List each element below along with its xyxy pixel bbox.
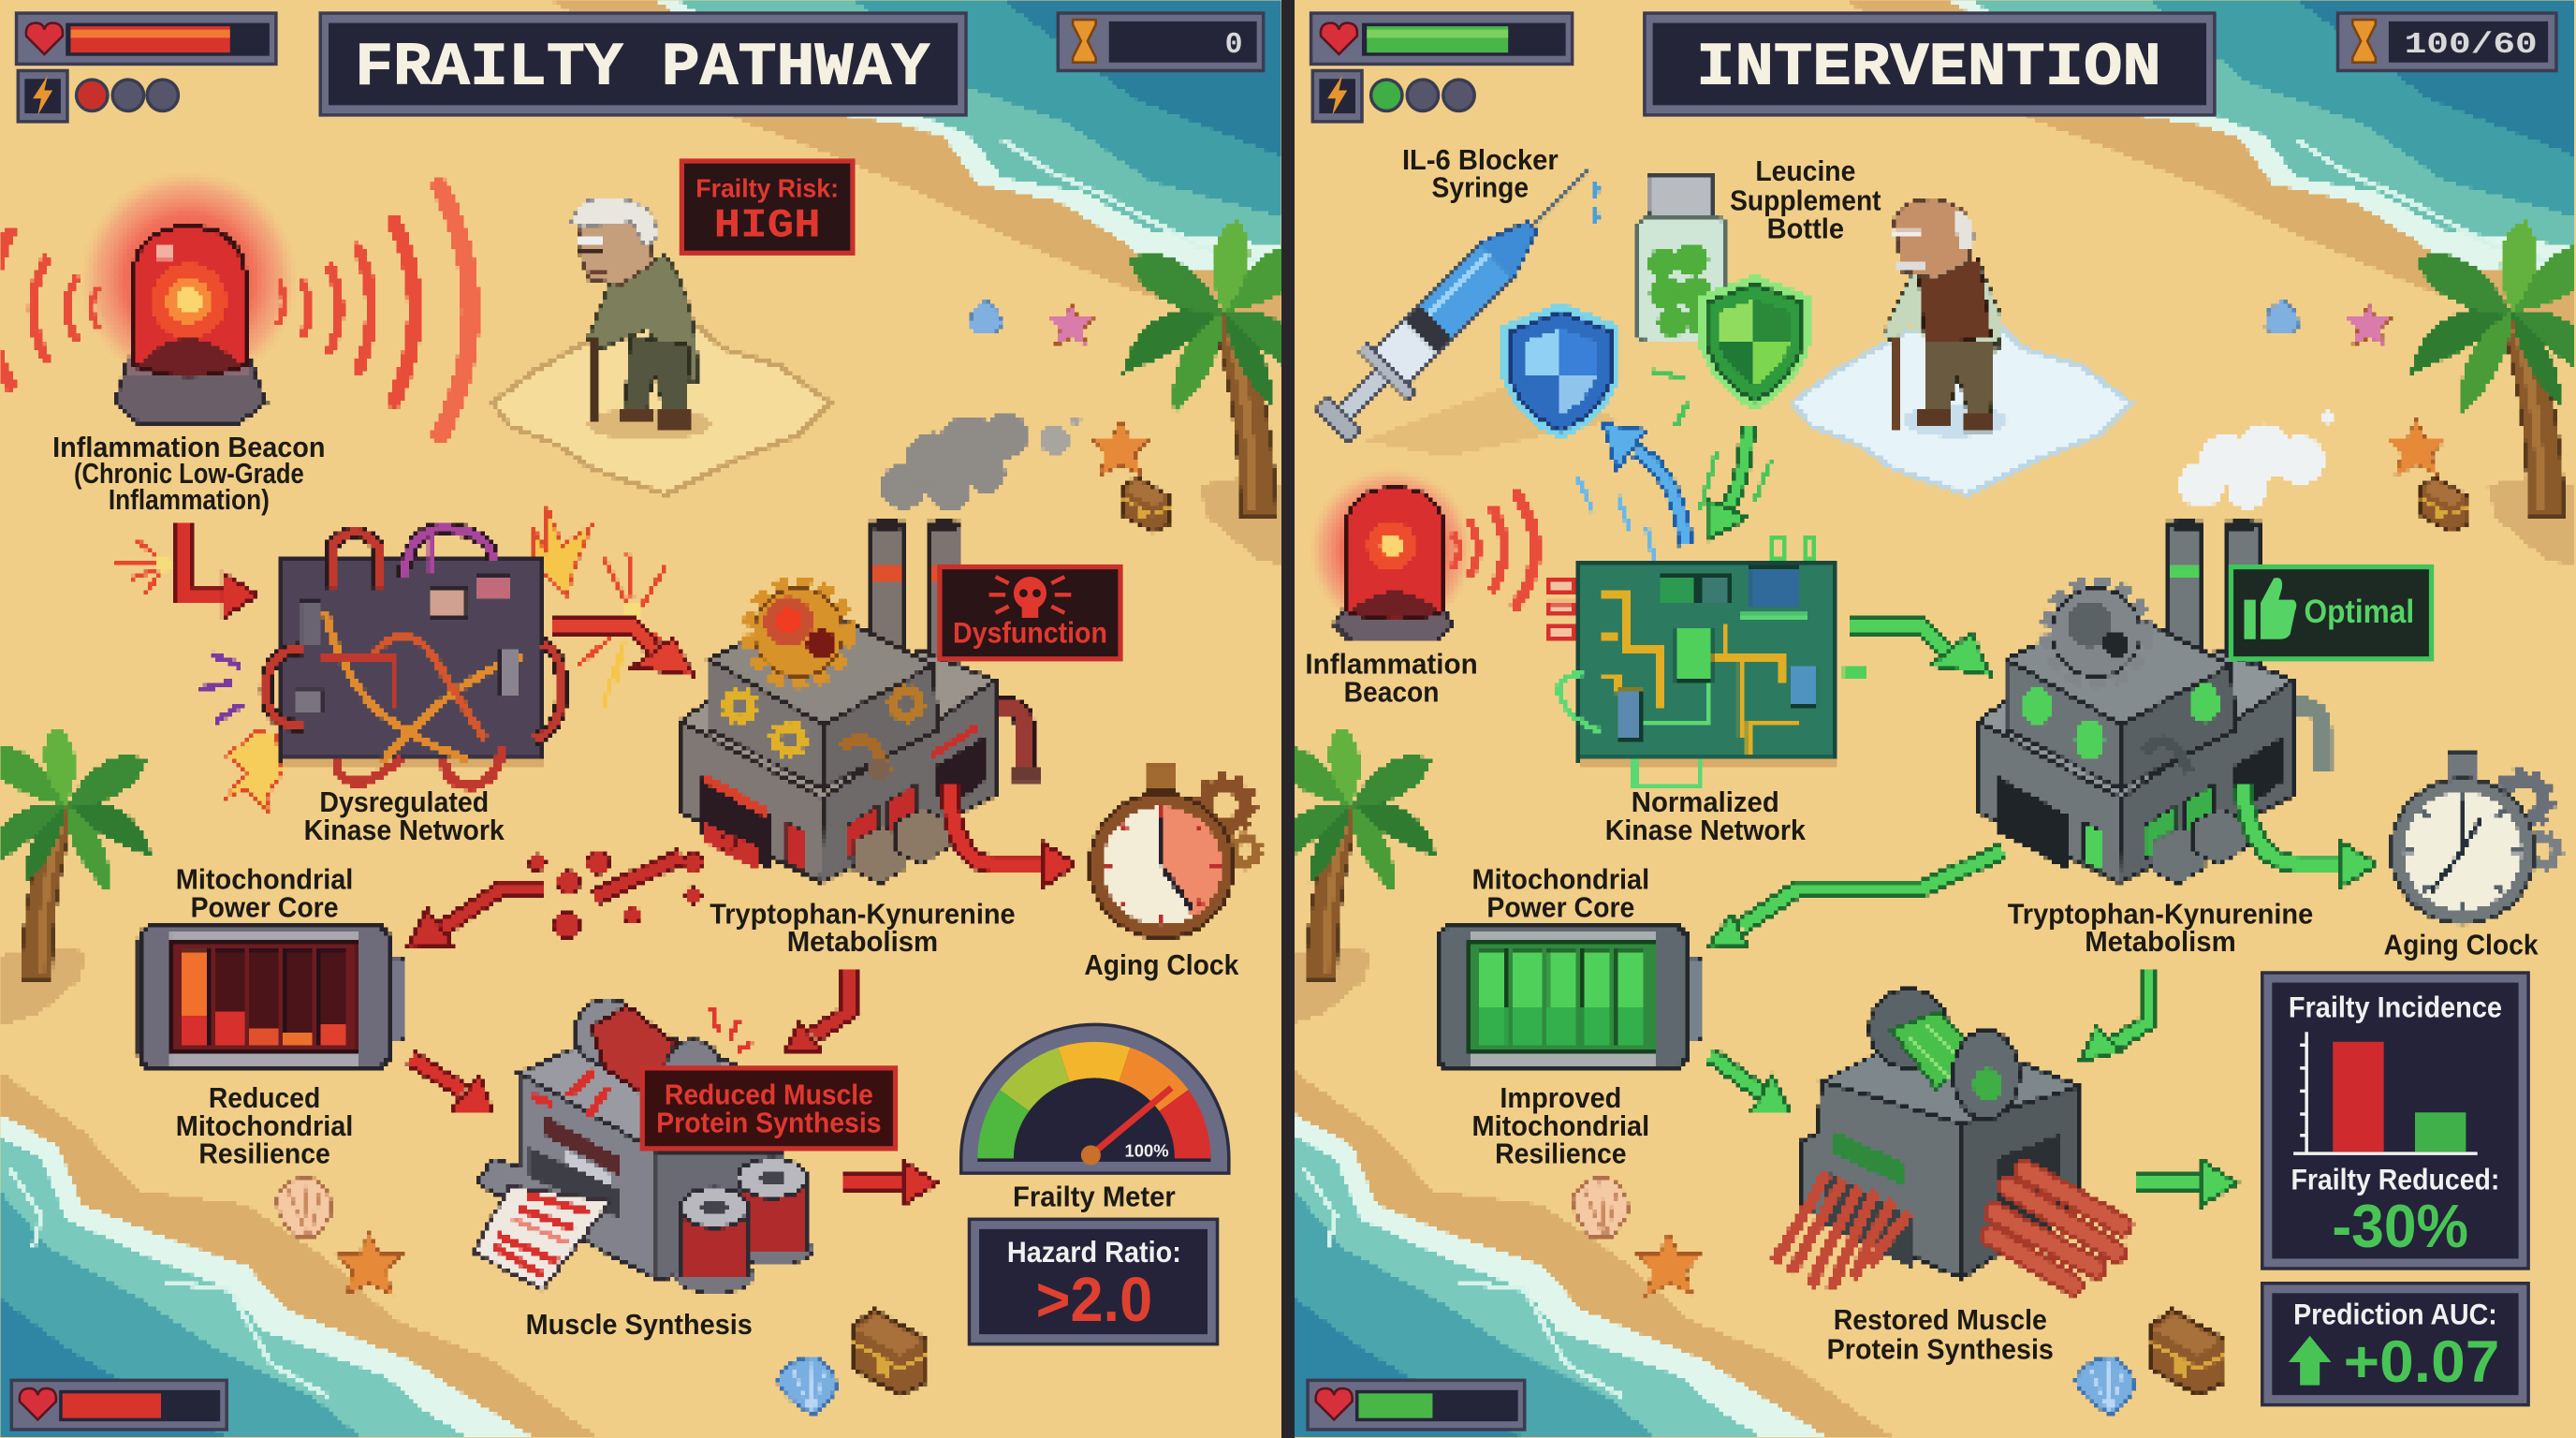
label: IL-6 blocker syringe: IL-6 Blocker: [1402, 143, 1559, 176]
frailty risk badge: Frailty Risk:: [695, 174, 839, 203]
battery power core: [139, 925, 404, 1070]
bottom health bar: [1308, 1380, 1525, 1430]
label: muscle synthesis: Muscle Synthesis: [526, 1308, 753, 1341]
arrow: factory to muscle machine: [783, 970, 849, 1053]
frailty incidence card: Frailty Reduced:: [2291, 1163, 2499, 1196]
prediction AUC card: [2262, 1284, 2528, 1405]
label: inflammation beacon: Inflammation Beacon: [52, 431, 326, 463]
incidence bar chart: [2293, 1032, 2478, 1153]
inflammation beacon: [80, 171, 298, 424]
dysfunction badge: Dysfunction: [953, 615, 1107, 649]
reduced muscle protein synthesis badge: Protein Synthesis: [656, 1106, 882, 1138]
label: tryptophan-kynurenine metabolism: [2008, 897, 2313, 958]
shoreline and water: [1295, 0, 2576, 1438]
dysfunction badge: [940, 567, 1120, 659]
energy slots: [1312, 70, 1474, 122]
title: [320, 13, 966, 115]
upper block: [708, 608, 933, 725]
label: inflammation beacon: Inflammation: [1305, 648, 1478, 681]
normalized kinase board: [1549, 537, 1866, 785]
healthy factory: [1978, 520, 2323, 884]
health bar: [1311, 13, 1573, 64]
arrow: battery to muscle machine: [411, 1058, 493, 1112]
label: leucine supplement bottle: Supplement: [1730, 184, 1881, 217]
leucine bottle: [1636, 174, 1727, 342]
curved green arrow: [1707, 426, 1748, 540]
aging clock: [1090, 764, 1262, 938]
restored muscle machine: [1775, 990, 2123, 1290]
label: dysregulated kinase network: Kinase Network: [304, 814, 505, 846]
shoreline and water: [0, 0, 1281, 1438]
label: inflammation beacon: Inflammation): [109, 483, 270, 516]
syringe: [1308, 143, 1618, 457]
label: reduced mitochondrial resilience: Reduced: [209, 1081, 320, 1114]
palm tree top right: [2410, 220, 2576, 575]
broken arrow: factory to battery: [407, 835, 736, 948]
reduced muscle protein synthesis badge: [642, 1068, 896, 1149]
label: restored muscle protein synthesis: Restored Muscle: [1834, 1303, 2047, 1336]
label: normalized kinase network: Normalized: [1632, 785, 1779, 818]
palm tree top right: [1121, 219, 1281, 565]
label: reduced mitochondrial resilience: [176, 1081, 353, 1170]
label: improved mitochondrial resilience: [1472, 1081, 1649, 1170]
title: [1645, 13, 2215, 115]
label: leucine supplement bottle: Bottle: [1767, 212, 1844, 244]
label: frailty meter: Frailty Meter: [1013, 1180, 1176, 1212]
arrow: factory to aging clock: [949, 785, 1076, 888]
lower tier: [681, 651, 996, 799]
small signal waves: [1454, 493, 1535, 605]
label: improved mitochondrial resilience: Mitochondrial: [1472, 1109, 1649, 1142]
label: normalized kinase network: Kinase Network: [1605, 814, 1807, 846]
label: restored muscle protein synthesis: Protein Synthesis: [1827, 1333, 2054, 1366]
label: aging clock: Aging Clock: [2384, 929, 2539, 961]
palm tree left: [0, 726, 153, 1029]
arrow: kinase to factory: [553, 626, 694, 675]
label: leucine supplement bottle: Leucine: [1755, 154, 1855, 187]
lower tier: [1978, 651, 2293, 799]
arrow: machine to frailty meter: [842, 1162, 938, 1205]
kynurenine factory: [681, 520, 1040, 884]
signal waves: [0, 187, 471, 435]
upper block: [2006, 608, 2231, 725]
frailty incidence card: -30%: [2332, 1192, 2468, 1260]
arrow: factory to battery: [1707, 851, 2002, 948]
label: improved mitochondrial resilience: Resilience: [1495, 1137, 1627, 1170]
healthy aging clock: [2391, 753, 2561, 923]
frailty risk badge: [681, 161, 853, 253]
panel: intervention: [1266, 0, 2576, 1438]
beach decorations: [276, 299, 1170, 1415]
frailty risk badge: HIGH: [714, 203, 821, 250]
title: FRAILTY PATHWAY: [355, 35, 929, 103]
label: mitochondrial power core: Power Core: [1486, 890, 1634, 923]
health bar: [17, 13, 276, 64]
label: reduced mitochondrial resilience: Resilience: [198, 1137, 330, 1170]
reduced muscle protein synthesis badge: Reduced Muscle: [665, 1078, 873, 1110]
label: reduced mitochondrial resilience: Mitochondrial: [176, 1109, 353, 1142]
palm tree left: [1266, 726, 1437, 1029]
label: tryptophan-kynurenine metabolism: [710, 897, 1016, 958]
hazard ratio card: Hazard Ratio:: [1007, 1235, 1181, 1269]
white smoke: [2178, 411, 2334, 509]
label: inflammation beacon: [52, 431, 326, 516]
blue shield: [1501, 302, 1620, 440]
energy slots: [18, 70, 178, 122]
label: mitochondrial power core: Mitochondrial: [1472, 863, 1649, 896]
arrow: machine to results: [2137, 1160, 2237, 1206]
arrow: factory to clock: [2243, 785, 2378, 888]
small inflammation beacon: [1310, 468, 1473, 641]
kinase network board: [266, 528, 562, 785]
label: tryptophan-kynurenine metabolism: Metabolism: [2085, 925, 2236, 958]
label: improved mitochondrial resilience: Improved: [1500, 1081, 1621, 1114]
arrow: kinase to factory: [1850, 626, 1991, 675]
label: mitochondrial power core: [1472, 863, 1649, 923]
elderly frail man on sand: [493, 198, 829, 494]
label: restored muscle protein synthesis: [1827, 1303, 2054, 1366]
label: inflammation beacon: Beacon: [1344, 675, 1439, 708]
label: aging clock: Aging Clock: [1084, 948, 1239, 981]
prediction AUC card: +0.07: [2344, 1329, 2499, 1395]
optimal badge: Optimal: [2305, 594, 2414, 630]
sparks near kinase: [115, 506, 677, 814]
label: mitochondrial power core: Power Core: [191, 890, 339, 923]
optimal badge: [2231, 567, 2432, 659]
panel: frailty pathway: [0, 0, 1323, 1438]
label: mitochondrial power core: [176, 863, 353, 923]
frailty incidence card: Frailty Incidence: [2289, 990, 2502, 1023]
battery power core full: [1438, 925, 1702, 1070]
timer: [2338, 13, 2556, 70]
green shield: [1699, 274, 1810, 411]
bottom health bar: [11, 1380, 227, 1430]
frailty meter gauge: 100%: [1125, 1141, 1169, 1161]
hazard ratio card: >2.0: [1036, 1266, 1152, 1335]
smoke: [881, 413, 1081, 511]
arrow: battery to machine: [1710, 1055, 1791, 1112]
frailty meter gauge: [961, 1024, 1229, 1173]
muscle synthesis machine: [473, 999, 813, 1293]
label: tryptophan-kynurenine metabolism: Tryptophan-Kynurenine: [2008, 897, 2313, 930]
divider: [1281, 0, 1295, 1438]
frailty incidence card: [2262, 973, 2528, 1269]
curved blue arrow: [1603, 424, 1686, 546]
label: leucine supplement bottle: [1730, 154, 1881, 244]
label: mitochondrial power core: Mitochondrial: [176, 863, 353, 896]
recovered man on ice: [1793, 198, 2130, 494]
sparkle trails: [1577, 372, 1771, 567]
timer: 100/60: [2405, 29, 2538, 62]
title: INTERVENTION: [1696, 35, 2161, 103]
label: inflammation beacon: (Chronic Low-Grade: [74, 457, 304, 490]
hazard ratio card: [970, 1219, 1218, 1344]
label: normalized kinase network: [1605, 785, 1807, 846]
timer: [1058, 13, 1264, 70]
label: tryptophan-kynurenine metabolism: Metabolism: [787, 925, 938, 958]
arrow: beacon to kinase: [184, 522, 258, 618]
label: IL-6 blocker syringe: [1402, 143, 1559, 204]
label: inflammation beacon: [1305, 648, 1478, 708]
label: dysregulated kinase network: [304, 785, 505, 846]
label: IL-6 blocker syringe: Syringe: [1432, 171, 1529, 204]
arrow: factory to machine: [2080, 970, 2149, 1062]
timer: 0: [1225, 29, 1243, 62]
label: dysregulated kinase network: Dysregulated: [319, 785, 489, 818]
label: tryptophan-kynurenine metabolism: Tryptophan-Kynurenine: [710, 897, 1016, 930]
beach decorations: [1573, 299, 2468, 1415]
prediction AUC card: Prediction AUC:: [2293, 1298, 2497, 1331]
